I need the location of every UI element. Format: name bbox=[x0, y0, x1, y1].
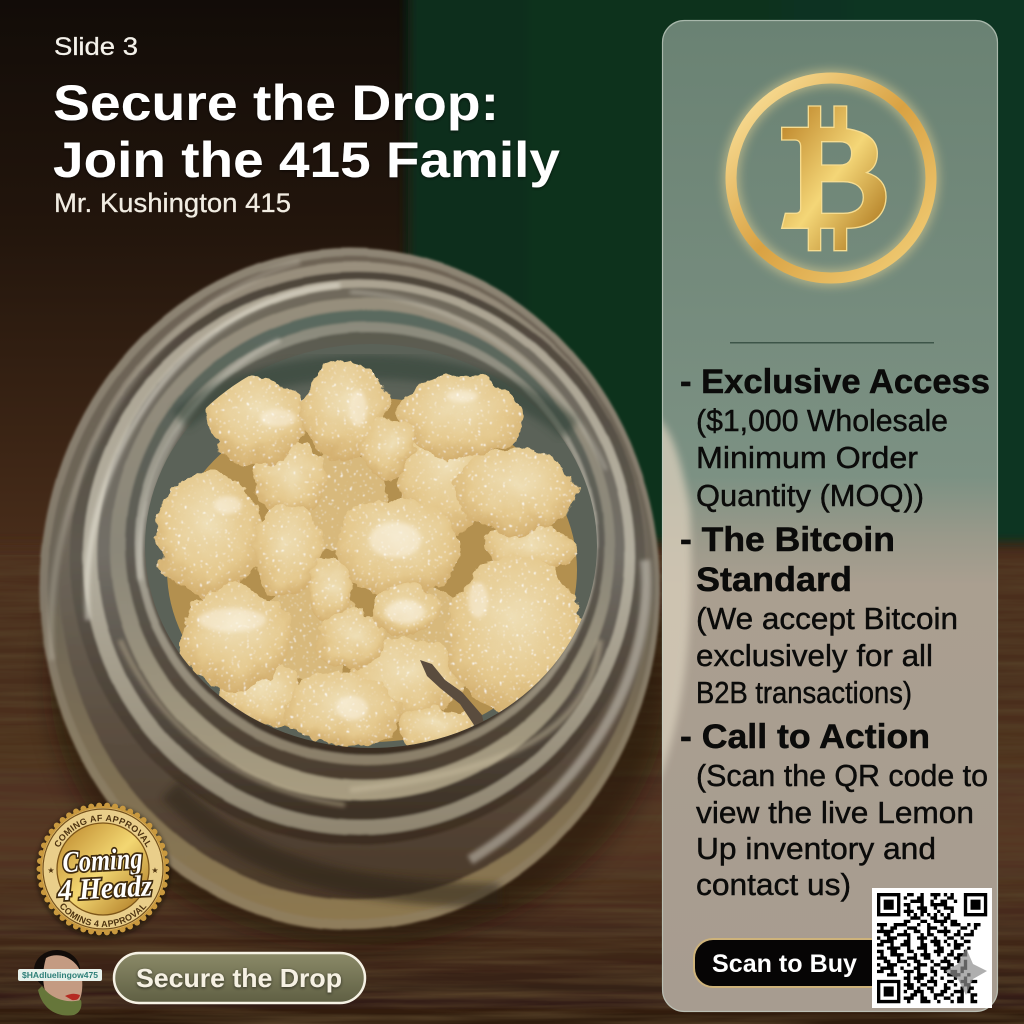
item: exclusive access bbox=[680, 363, 990, 513]
slide label: Slide 3 bbox=[54, 33, 138, 61]
icon: bitcoin coin bbox=[731, 78, 931, 278]
item: exclusive access: ($1,000 Wholesale bbox=[696, 403, 948, 438]
panel: frosted sidebar bbox=[650, 20, 998, 1012]
divider bbox=[730, 342, 934, 344]
item: exclusive access: Quantity (MOQ)) bbox=[696, 478, 924, 513]
item: bitcoin standard: (We accept Bitcoin bbox=[696, 601, 958, 636]
seal bottom text: COMINS 4 APPROVAL bbox=[60, 904, 147, 928]
heading bbox=[53, 75, 560, 188]
item: call to action: view the live Lemon bbox=[696, 795, 974, 830]
frost highlights bbox=[198, 390, 488, 720]
item: call to action: - Call to Action bbox=[680, 718, 930, 756]
seal: Coming 4 Headz bbox=[34, 802, 172, 940]
seal star left: ★ bbox=[47, 866, 55, 875]
seal star right: ★ bbox=[151, 866, 159, 875]
seal script: Coming bbox=[62, 842, 143, 879]
item: bitcoin standard: exclusively for all bbox=[696, 638, 933, 673]
item: bitcoin standard: Standard bbox=[696, 561, 852, 599]
item: exclusive access: - Exclusive Access bbox=[680, 363, 990, 401]
dark gap between crystals bbox=[420, 660, 484, 725]
heading: Secure the Drop: bbox=[53, 75, 499, 131]
benefit list bbox=[680, 363, 990, 902]
item: bitcoin standard bbox=[680, 521, 958, 710]
scan to buy pill: Scan to Buy bbox=[712, 950, 857, 978]
item: call to action: contact us) bbox=[696, 867, 851, 902]
item: call to action: (Scan the QR code to bbox=[696, 758, 988, 793]
seal script bbox=[55, 842, 153, 907]
rim highlights bbox=[51, 262, 646, 895]
avatar with handle bbox=[18, 950, 102, 1016]
handle label: $HAdluelingow475 bbox=[22, 970, 98, 980]
secure the drop button bbox=[114, 953, 365, 1003]
seal top text: COMING AF APPROVAL bbox=[54, 814, 150, 848]
item: bitcoin standard: B2B transactions) bbox=[696, 675, 912, 710]
QR code bbox=[872, 888, 992, 1008]
item: call to action bbox=[680, 718, 988, 902]
title block bbox=[53, 33, 560, 218]
seal script: 4 Headz bbox=[56, 869, 153, 907]
glass jar bbox=[40, 248, 670, 945]
wax crystals bbox=[155, 362, 583, 748]
scan to buy pill bbox=[694, 939, 894, 987]
jar interior bbox=[145, 344, 597, 748]
brand line: Mr. Kushington 415 bbox=[54, 188, 291, 218]
item: bitcoin standard: - The Bitcoin bbox=[680, 521, 895, 559]
item: call to action: Up inventory and bbox=[696, 831, 936, 866]
heading: Join the 415 Family bbox=[53, 132, 560, 188]
secure the drop button: Secure the Drop bbox=[136, 963, 342, 993]
item: exclusive access: Minimum Order bbox=[696, 440, 918, 475]
